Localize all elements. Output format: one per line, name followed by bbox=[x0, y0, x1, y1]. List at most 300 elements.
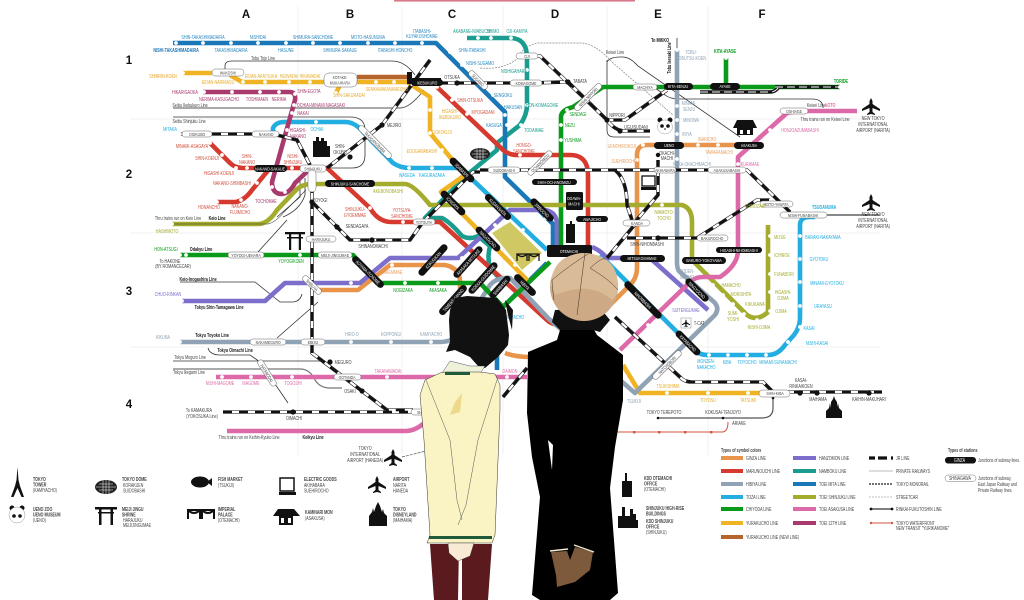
legend: Electric Goods: ELECTRIC GOODS bbox=[304, 476, 337, 482]
legend: line colours bbox=[721, 447, 950, 540]
white interchange pills bbox=[182, 53, 827, 415]
icon: imperial palace bridge bbox=[517, 254, 539, 261]
station labels: Hibiya and Ginza: NISHI-MAGOME bbox=[206, 380, 234, 386]
station labels: JR and other black: ARIAKE bbox=[732, 420, 746, 426]
black interchange pills: AYASE bbox=[720, 83, 731, 89]
legend: station types bbox=[945, 447, 1020, 493]
legend: Meiji Jingu: SHRINE bbox=[122, 512, 136, 518]
landmark legend bbox=[9, 467, 684, 535]
character: boy bbox=[527, 253, 623, 600]
white interchange pills: OGIKUBO bbox=[189, 131, 206, 137]
station labels: Toei Shinjuku: OJIMA bbox=[775, 308, 787, 314]
white interchange pills: KANDA bbox=[631, 220, 643, 226]
legend: Disneyland: (MAIHAMA) bbox=[393, 517, 413, 523]
white interchange pills: MUKAIHARA bbox=[330, 80, 351, 86]
station labels: Hibiya and Ginza: IRIYA bbox=[682, 131, 692, 137]
station labels: Hibiya and Ginza: MINAMI- bbox=[682, 100, 697, 106]
station labels: Yurakucho: EIDAN-NARIMASU bbox=[202, 79, 234, 85]
station labels: Hibiya and Ginza: ROPPONGI bbox=[381, 331, 401, 337]
station labels: Hibiya and Ginza: KODEN- bbox=[680, 268, 695, 274]
station labels: Marunouchi: SHIN-OTSUKA bbox=[457, 97, 483, 103]
legend: Imperial Palace: (OTEMACHI) bbox=[218, 517, 240, 523]
station labels: JR and other black: Tokyu Meguro Line bbox=[174, 354, 206, 360]
legend: Imperial Palace: IMPERIAL bbox=[218, 506, 236, 512]
station labels: Marunouchi: HONANCHO bbox=[198, 204, 220, 210]
legend: Ueno Zoo: UENO ZOO bbox=[33, 506, 53, 512]
station labels: JR and other black: NEW TOKYO bbox=[862, 211, 885, 217]
station labels: Mita: SHIMURA-SAKAUE bbox=[323, 47, 357, 53]
station labels: Toei Shinjuku: IWAMOTO- bbox=[654, 209, 674, 215]
legend: Fish Market: (TSUKIJI) bbox=[218, 482, 234, 488]
station labels: Toei 12th: TOSHIMAEN bbox=[246, 96, 268, 102]
station labels: JR and other black: KAIHIN-MAKUHARI bbox=[852, 396, 886, 402]
station labels: JR and other black bbox=[155, 37, 890, 463]
legend: Tokyo Dome: KORAKUEN bbox=[123, 482, 143, 488]
station labels: JR and other black: Tokyu Toyoko Line bbox=[195, 332, 229, 338]
station labels: Hibiya and Ginza bbox=[155, 49, 836, 404]
station labels: JR and other black: INTERNATIONAL bbox=[858, 217, 888, 223]
station labels: JR and other black: AIRPORT (NARITA) bbox=[856, 223, 890, 229]
white interchange pills: SUIDOBASHI bbox=[493, 167, 515, 173]
white interchange pills: WAKOSHI bbox=[220, 70, 236, 76]
station labels: Hibiya and Ginza: GAIEMMAE bbox=[382, 269, 402, 275]
station labels: Hibiya and Ginza: AOTO bbox=[825, 102, 836, 108]
station labels: JR and other black: Tokyu Oimachi Line bbox=[217, 347, 253, 353]
icon: Shinjuku high-rise bbox=[313, 137, 330, 157]
icon: Tokyo Dome bbox=[470, 148, 490, 160]
legend: Tokyo Tower bbox=[11, 467, 57, 497]
station labels: Yurakucho: IKEBUKURO bbox=[439, 114, 462, 120]
station labels: Mita: HASUNE bbox=[278, 47, 294, 53]
legend: Imperial Palace bbox=[188, 506, 240, 523]
black interchange pills: MITSUKOSHIMAE bbox=[627, 255, 657, 261]
legend: KDD Otemachi: KDD OTEMACHI bbox=[644, 475, 672, 481]
black interchange pills: SHIMBASHI bbox=[492, 278, 509, 296]
girl collar bbox=[442, 361, 485, 374]
girl hands bbox=[448, 543, 474, 561]
white interchange pills: HATANODAI bbox=[259, 363, 274, 383]
legend: line colours: TOKYO MONORAIL bbox=[896, 481, 929, 487]
white interchange pills: SHI bbox=[417, 409, 423, 415]
station labels: JR and other black: Seibu Ikebukuro Line bbox=[172, 102, 208, 108]
station labels: JR and other black: SHIN- bbox=[335, 143, 346, 149]
boy coat bbox=[527, 328, 623, 600]
station labels: Namboku: SHIMO bbox=[487, 28, 500, 34]
station labels: Hibiya and Ginza: TAWARAMACHI bbox=[705, 149, 733, 155]
legend: Disneyland: TOKYO bbox=[393, 506, 406, 512]
station labels: Hibiya and Ginza: KURAMAE bbox=[741, 161, 759, 167]
white interchange pills: NAKANO bbox=[259, 131, 274, 137]
black interchange pills: IIDABASHI bbox=[454, 162, 470, 178]
legend: Shinjuku high-rise bbox=[618, 505, 684, 535]
station labels: Namboku: OJI-KAMIYA bbox=[506, 28, 528, 34]
station labels: Chiyoda: NOGIZAKA bbox=[393, 287, 413, 293]
station labels: Marunouchi: SHIN- bbox=[242, 153, 253, 159]
Yurikamome bbox=[600, 422, 728, 432]
legend: Tokyo Dome: TOKYO DOME bbox=[122, 476, 147, 482]
legend: line colours: STREETCAR bbox=[896, 494, 919, 500]
station labels: Hibiya and Ginza: NAKA-OKACHIMACHI bbox=[673, 161, 711, 167]
white interchange pills: TAKADANOBABA bbox=[363, 130, 387, 154]
line: Toei 12th bbox=[203, 92, 312, 194]
streetcar dotted line bbox=[480, 43, 673, 115]
legend: KDD Otemachi: (OTEMACHI) bbox=[644, 486, 666, 492]
legend: line colours: NEW TRANSIT "YURIKAMOME" bbox=[896, 525, 950, 531]
station labels: Marunouchi: FUJIMICHO bbox=[230, 209, 251, 215]
station labels: Marunouchi: SHINJUKU bbox=[284, 159, 302, 165]
line: Namboku bbox=[425, 38, 527, 282]
station labels: JR and other black: AIRPORT (NARITA) bbox=[856, 127, 890, 133]
station labels: Hibiya and Ginza: MAGOME bbox=[242, 380, 260, 386]
black interchange pills: ASAKUSA bbox=[741, 142, 757, 148]
station labels: Tozai: WASEDA bbox=[399, 172, 415, 178]
legend: Meiji Jingu bbox=[95, 506, 151, 528]
station labels: JR and other black: Keisei Line bbox=[606, 49, 625, 55]
station labels: Mita: HAKUSAN bbox=[504, 104, 522, 110]
station labels: Toei Shinjuku: NISHI-OJIMA bbox=[748, 324, 770, 330]
station labels: Mita: NISHI-SUGAMO bbox=[466, 60, 495, 66]
white interchange pills: OCHANOMIZU bbox=[530, 153, 551, 174]
line: Toei Mita bbox=[173, 43, 553, 370]
black interchange pills: BAKURO-YOKOYAMA bbox=[686, 257, 722, 263]
station labels: JR and other black: MACHI bbox=[661, 155, 673, 161]
station labels: JR and other black: OTSUKA bbox=[444, 74, 460, 80]
icon: KDD Otemachi building bbox=[566, 221, 575, 243]
station labels: JR and other black: Seibu Shinjuku Line bbox=[172, 118, 206, 124]
white interchange pills: KOMAGOME bbox=[516, 80, 537, 86]
white interchange pills: NISHI-FUNABASHI bbox=[788, 212, 818, 218]
station labels: Marunouchi: YOTSUYA- bbox=[393, 207, 412, 213]
legend: station types: Junctions of subway, bbox=[978, 475, 1011, 481]
white interchange pills: OSHIAGE bbox=[786, 108, 802, 114]
station labels: JR and other black: TABATA bbox=[573, 78, 587, 84]
legend: line colours: HANZOMON LINE bbox=[819, 455, 849, 461]
white interchange pills: NISHI-NIPPORI bbox=[577, 86, 599, 108]
white interchange pills: EBISU bbox=[308, 339, 318, 345]
black interchange pills: UENO bbox=[664, 142, 675, 148]
black interchange pills: AKASAKA-MITSUKE bbox=[455, 248, 481, 276]
station labels: Tozai bbox=[163, 126, 844, 370]
station labels: Chiyoda: KITA-AYASE bbox=[714, 48, 736, 54]
station labels: JR and other black: RINKAIKOEN bbox=[789, 383, 813, 389]
station labels: JR and other black: (YOKOSUKA Line) bbox=[186, 413, 218, 419]
station labels: Hibiya and Ginza: KAMIYACHO bbox=[502, 314, 525, 320]
station labels: Marunouchi: NAKANO- bbox=[232, 203, 249, 209]
station labels: JR and other black: OIMACHI bbox=[286, 415, 302, 421]
white interchange pills: AKIHABARA bbox=[655, 167, 675, 173]
legend: Shinjuku high-rise: SHINJUKU HIGH-RISE bbox=[646, 505, 684, 511]
black interchange pills bbox=[254, 79, 764, 357]
legend: line colours: TOEI 12TH LINE bbox=[819, 520, 846, 526]
station labels: JR and other black: SENDAGAYA bbox=[346, 223, 368, 229]
station labels: JR and other black: Odakyu Line bbox=[190, 246, 213, 252]
girl sweater bbox=[420, 372, 500, 543]
legend: Shinjuku high-rise: BUILDINGS bbox=[646, 511, 666, 517]
icon: Narita plane 1 bbox=[862, 98, 880, 115]
station labels: Toei 12th: NAKANO bbox=[290, 133, 306, 139]
legend: line colours: YURAKUCHO LINE bbox=[746, 520, 778, 526]
legend: line colours: TOKYO WATERFRONT bbox=[896, 520, 935, 526]
legend: Airport: NARITA bbox=[393, 482, 406, 488]
station labels: Marunouchi: NAKANO-SHIMBASHI bbox=[213, 180, 251, 186]
legend: station types: Private Railway lines. bbox=[978, 487, 1012, 493]
label: Tobu Isesaki line: Tobu Isesaki Line bbox=[666, 42, 672, 74]
legend: line colours: TOZAI LINE bbox=[746, 494, 766, 500]
station labels: Mita: SHIN-ITABASHI bbox=[458, 47, 486, 53]
station labels: JR and other black: To MIKKO bbox=[651, 37, 669, 43]
character: girl bbox=[420, 296, 513, 600]
JR lines bbox=[180, 56, 882, 412]
column headings: E bbox=[654, 9, 662, 21]
station labels: Marunouchi: MINAMI-ASAGAYA bbox=[176, 143, 208, 149]
station labels: Chiyoda: SENDAGI bbox=[570, 111, 586, 117]
legend: Electric Goods bbox=[279, 476, 337, 495]
line: Ginza bbox=[318, 145, 737, 357]
station labels: Marunouchi: SHINJUKU- bbox=[345, 206, 366, 212]
white interchange pills: SHIBUYA bbox=[305, 278, 319, 293]
station labels: Namboku: NISHIGAHARA bbox=[501, 68, 527, 74]
station labels: Toei 12th bbox=[172, 88, 345, 204]
station labels: Tozai: OCHIAI bbox=[311, 126, 323, 132]
station labels: Toei 12th: NERIMA bbox=[272, 96, 286, 102]
station labels: Toei Shinjuku: MIZUE bbox=[774, 234, 786, 240]
station labels: Yurakucho: HIKAWADAI bbox=[300, 73, 320, 79]
line: Tozai bbox=[273, 122, 815, 355]
station labels: Hibiya and Ginza: DAIMON bbox=[502, 368, 518, 374]
station labels: JR and other black: OKUBO bbox=[333, 149, 347, 155]
subway lines bbox=[170, 38, 857, 431]
station labels: Mita: NISHIDAI bbox=[250, 34, 266, 40]
legend: Tokyo Tower: TOKYO bbox=[33, 476, 46, 482]
black interchange pills: NIHOMBASHI bbox=[633, 290, 653, 310]
legend: line colours: JR LINE bbox=[896, 455, 910, 461]
line: Yurakucho new line bbox=[357, 75, 408, 79]
station labels: Yurakucho: SHINRIN-KOEN bbox=[149, 73, 177, 79]
station labels: Hibiya and Ginza: KAMIYACHO bbox=[420, 331, 443, 337]
Rinkai line bbox=[658, 398, 773, 418]
station labels: JR and other black: NIPPORI bbox=[609, 112, 625, 118]
station labels: Namboku: HON-KOMAGOME bbox=[526, 102, 558, 108]
station labels: Tozai: TOYOCHO bbox=[738, 359, 757, 365]
legend: Shinjuku high-rise: (SHINJUKU) bbox=[646, 529, 667, 535]
station labels: Toei Shinjuku: KIKUKAWA bbox=[745, 301, 765, 307]
line: Toei Shinjuku bbox=[172, 184, 768, 318]
station labels: Hibiya and Ginza: TOGOSHI bbox=[284, 380, 302, 386]
station labels: Mita: KASUGA bbox=[486, 122, 502, 128]
station labels: Toei Shinjuku: SHINOZAKI bbox=[745, 203, 765, 209]
black interchange pills: KOKKAI-GIJIDOMAE bbox=[470, 264, 497, 292]
station labels: Tozai: NISHI-KASAI bbox=[806, 340, 828, 346]
station labels: JR and other black: UGUISUDANI bbox=[624, 124, 648, 130]
legend: Airport bbox=[368, 476, 410, 494]
legend: line colours: NAMBOKU LINE bbox=[819, 468, 846, 474]
legend: Kaminarimon bbox=[273, 509, 333, 525]
black interchange pills: SHIN-OCHANOMIZU bbox=[537, 179, 571, 185]
station labels: Hibiya and Ginza: KIKUNA bbox=[156, 334, 170, 340]
station labels: Hibiya and Ginza: MINOWA bbox=[683, 117, 699, 123]
station labels: JR and other black: SHIN-NIHONBASHI bbox=[630, 241, 664, 247]
station labels: Tozai: TSUDANUMA bbox=[812, 204, 837, 210]
line: Toei Asakusa bbox=[216, 111, 857, 377]
imperial palace block bbox=[492, 222, 542, 270]
station labels: JR and other black: OKACHI- bbox=[659, 150, 675, 156]
station labels: Yurakucho: KANAMECHO bbox=[384, 86, 409, 92]
station labels: Toei Shinjuku: FUNABORI bbox=[774, 271, 794, 277]
station labels: Hibiya and Ginza: HIRO-O bbox=[345, 331, 359, 337]
station labels: Chiyoda: HON-ATSUGI bbox=[154, 246, 178, 252]
station labels: Hibiya and Ginza: HONJOAZUMABASHI bbox=[781, 127, 819, 133]
station labels: Toei 12th: HIGASHI- bbox=[290, 127, 307, 133]
legend: Tokyo Dome: SUIDOBASHI bbox=[123, 488, 145, 494]
legend: Meiji Jingu: HARAJUKU bbox=[123, 517, 143, 523]
station labels: Tozai: KIBA bbox=[723, 359, 731, 365]
black junction nodes bbox=[290, 79, 872, 419]
station labels: JR and other black: Keio-Inogashira Line bbox=[179, 276, 217, 282]
station labels: JR and other black: Tobu Tojo Line bbox=[251, 55, 276, 61]
black interchange pills: KOKUGIKAN bbox=[424, 251, 442, 270]
boy hat bbox=[550, 253, 618, 321]
icon: Haneda plane bbox=[384, 449, 402, 466]
legend: line colours: Types of symbol colors bbox=[721, 447, 762, 453]
white interchange pills: NAKAMEGURO bbox=[256, 339, 281, 345]
station labels: Chiyoda: YUSHIMA bbox=[564, 137, 582, 143]
station labels: Mita bbox=[153, 28, 522, 128]
station labels: Tozai: MINAMI-SUNAMACHI bbox=[759, 359, 797, 365]
black interchange pills: MACHI bbox=[568, 201, 580, 207]
station labels: Toei Shinjuku: MORISHITA bbox=[731, 291, 751, 297]
icon: T-CAT: T-CAT bbox=[694, 320, 705, 326]
station labels: Toei Shinjuku: HIGASHI- bbox=[775, 289, 792, 295]
station labels: Yurakucho: GOKOKUJI bbox=[432, 129, 452, 135]
legend: Airport: AIRPORT bbox=[393, 476, 410, 482]
station labels: Toei 12th: OCHIAI-MINAMI-NAGASAKI bbox=[297, 102, 345, 108]
legend: station types: GINZA bbox=[954, 457, 965, 463]
station labels: Mita: SENGOKU bbox=[494, 92, 512, 98]
boy gloves bbox=[551, 547, 593, 587]
legend: station types: SHINAGAWA bbox=[949, 475, 971, 481]
station labels: Namboku: AKABANE-IWABUCHI bbox=[453, 28, 491, 34]
legend: Fish Market: FISH MARKET bbox=[218, 476, 243, 482]
icon: T-CAT bbox=[681, 318, 705, 328]
station labels: Toei Shinjuku: ICHINOE bbox=[774, 252, 790, 258]
black interchange pills: HIGASHI-NIHOMBASHI bbox=[720, 247, 758, 253]
row headings: 1 bbox=[126, 55, 133, 67]
legend: line colours: TOEI ASAKUSA LINE bbox=[819, 506, 854, 512]
black interchange pills: SHINJUKU-SANCHOME bbox=[331, 181, 370, 187]
column headings: A bbox=[242, 9, 250, 21]
station labels: JR and other black: Thru trains run on Keihin-Kyuko Line bbox=[219, 434, 280, 440]
white interchange pills: BAKUROCHO bbox=[701, 235, 724, 241]
legend: Disneyland: DISNEYLAND bbox=[393, 512, 417, 518]
legend: line colours: TOEI SHINJUKU LINE bbox=[819, 494, 856, 500]
station labels: Hibiya and Ginza: UENOHIROKOJI bbox=[608, 143, 636, 149]
legend: Meiji Jingu: MEIJI JINGU bbox=[122, 506, 144, 512]
icon: torii bbox=[285, 232, 305, 250]
station labels: Tozai: BARAKI-NAKAYAMA bbox=[805, 234, 841, 240]
legend: Airport: HANEDA bbox=[393, 488, 408, 494]
black interchange pills: NINGYOCHO bbox=[687, 281, 707, 300]
white interchange pills: MACHIYA bbox=[637, 84, 653, 90]
column headings: C bbox=[448, 9, 456, 21]
station labels: Toei Shinjuku: HASHIMOTO bbox=[156, 228, 179, 234]
legend: Ueno Zoo: UENO MUSEUM bbox=[33, 512, 61, 518]
station labels: Tozai: NAKACHO bbox=[697, 364, 716, 370]
station labels: JR and other black: (BY ROMANCECAR) bbox=[155, 263, 191, 269]
station labels: JR and other black: KASAI- bbox=[795, 377, 808, 383]
station labels: Hibiya and Ginza: SENJU bbox=[683, 106, 695, 112]
white interchange pills: MOTO-YAWATA bbox=[763, 201, 789, 207]
station labels: JR and other black: YOYOGI bbox=[313, 197, 327, 203]
icon: panda bbox=[658, 118, 672, 134]
station labels: Chiyoda: NEZU bbox=[565, 122, 575, 128]
station labels: Chiyoda: AKASAKA bbox=[429, 287, 447, 293]
legend: station types: Junctions of subway lines. bbox=[978, 457, 1020, 463]
line: Yurakucho bbox=[183, 73, 765, 393]
legend: station types: Types of stations bbox=[948, 447, 978, 453]
station labels: JR and other black: To KAMAKURA bbox=[186, 407, 212, 413]
legend: Shinjuku high-rise: OFFICE bbox=[646, 524, 659, 530]
station labels: JR and other black: TOKYO TEREPOTO bbox=[647, 409, 682, 415]
station labels: Yurakucho bbox=[149, 73, 756, 403]
line: Marunouchi bbox=[210, 87, 588, 325]
station labels: Toei Shinjuku: TOCHO bbox=[657, 215, 671, 221]
black interchange pills: OTEMACHI bbox=[560, 248, 578, 254]
line: Hanzomon bbox=[182, 210, 708, 310]
JR Joban branch bbox=[700, 87, 840, 92]
station labels: Hibiya and Ginza: SUITENGUMAE bbox=[672, 307, 700, 313]
white interchange pills: OJI bbox=[524, 53, 530, 59]
station labels: Marunouchi: SHIN-KOENJI bbox=[195, 155, 219, 161]
station labels: Hibiya and Ginza: DOBUTSU-KOEN bbox=[676, 55, 706, 61]
station labels: JR and other black: NEW TOKYO bbox=[862, 115, 885, 121]
column headings: D bbox=[551, 9, 559, 21]
station labels: Toei 12th: SHIN-EGOTA bbox=[297, 88, 321, 94]
row headings: 4 bbox=[126, 399, 133, 411]
station labels: Tozai: URAYASU bbox=[814, 303, 832, 309]
station labels: Hibiya and Ginza: SUEHIROCHO bbox=[611, 158, 637, 164]
row headings bbox=[126, 55, 133, 411]
white interchange pills: MEIJI-JINGUMAE bbox=[321, 252, 349, 258]
white interchange pills: YOYOGI-UEHARA bbox=[231, 252, 261, 258]
station labels: Mita: NISHI-TAKASHIMADAIRA bbox=[153, 47, 199, 53]
station labels: Marunouchi: SANCHOME bbox=[391, 213, 413, 219]
legend: KDD Otemachi: OFFICE bbox=[644, 481, 657, 487]
station labels: Yurakucho: HIGASHI- bbox=[442, 108, 459, 114]
station labels: Mita: MOTO-HASUNUMA bbox=[351, 34, 385, 40]
station labels: Chiyoda bbox=[154, 48, 848, 293]
station labels: JR and other black: To HAKONE bbox=[160, 258, 180, 264]
station labels: Marunouchi: GYOEMMAE bbox=[344, 212, 366, 218]
Ikebukuro block bbox=[407, 72, 441, 84]
black interchange pills: JIMBOCHO bbox=[533, 202, 551, 219]
station labels: Marunouchi: HONGO- bbox=[516, 142, 532, 148]
station labels: Mita: SHIMURA-SANCHOME bbox=[293, 34, 333, 40]
station labels: Namboku bbox=[453, 28, 558, 133]
station labels: Yurakucho: TOYOSU bbox=[700, 397, 716, 403]
station labels: Hibiya and Ginza: MACHO bbox=[680, 274, 695, 280]
legend: line colours: HIBIYA LINE bbox=[746, 481, 766, 487]
legend: Tokyo Dome bbox=[95, 476, 147, 494]
black interchange pills: IKEBUKURO bbox=[417, 80, 438, 86]
station labels: Yurakucho: SENKAWA bbox=[366, 86, 384, 92]
legend: line colours: CHIYODA LINE bbox=[746, 506, 771, 512]
station labels: Namboku: TODAIMAE bbox=[524, 127, 544, 133]
station labels: JR and other black: Keio Line bbox=[209, 215, 226, 221]
station labels: JR and other black: Keikyu Line bbox=[303, 434, 324, 440]
row headings: 3 bbox=[126, 286, 132, 298]
Keisei and monorail extensions bbox=[790, 214, 880, 216]
black interchange pills: OGAWA- bbox=[567, 195, 582, 201]
